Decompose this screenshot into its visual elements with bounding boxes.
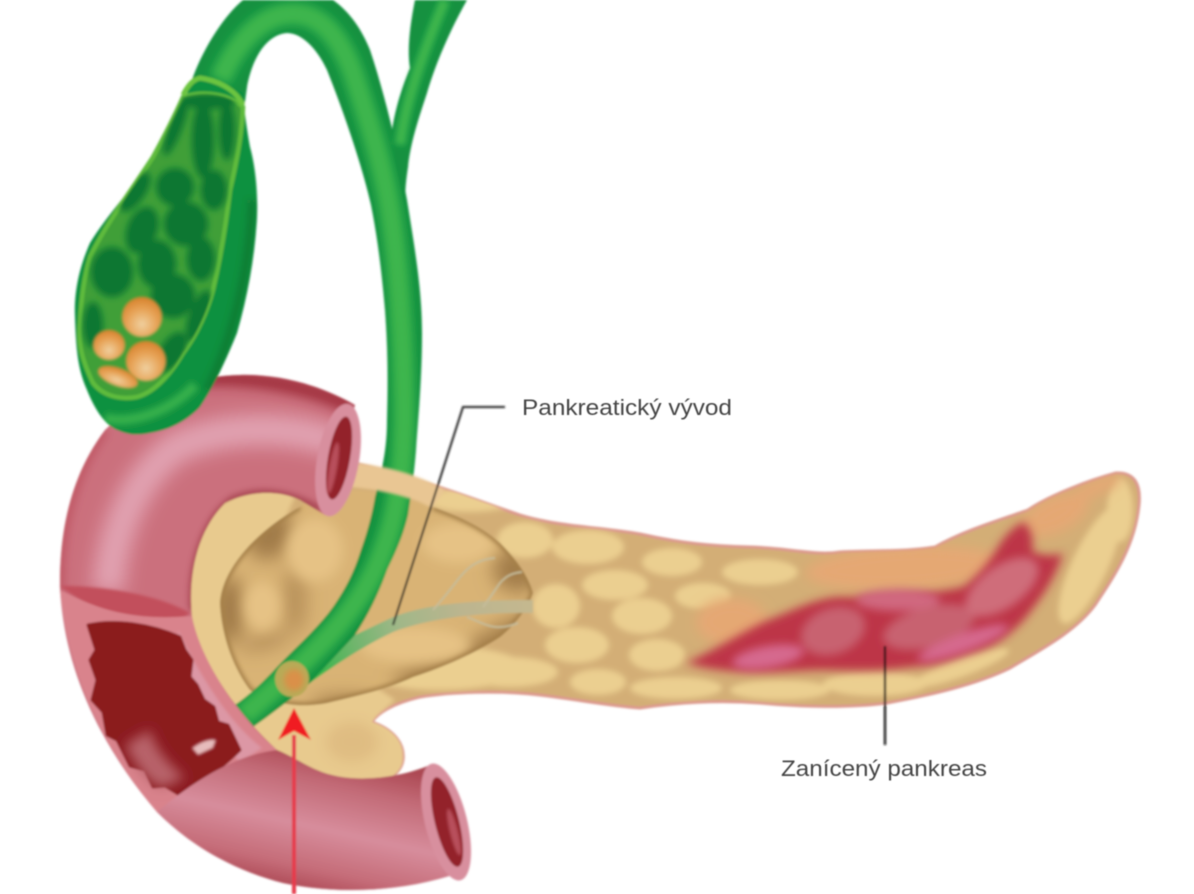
head light rim xyxy=(185,485,405,790)
label: Pankreatický vývod: Pankreatický vývod xyxy=(522,395,732,420)
pancreas cut-away cavity xyxy=(219,506,534,706)
leader line: pancreatic duct xyxy=(393,407,505,625)
opened wall xyxy=(60,590,277,812)
duodenum lumen xyxy=(88,622,240,797)
cavity shading xyxy=(221,515,530,702)
cream band across duct xyxy=(350,462,445,508)
peach zone near inflammation xyxy=(696,468,1126,646)
pancreatic duct xyxy=(310,558,533,683)
gallbladder xyxy=(75,77,257,435)
duodenum upper segment xyxy=(60,378,355,610)
impacted stone in ampulla xyxy=(275,661,309,697)
gallbladder neck rim xyxy=(183,78,243,105)
folded mucosa edge xyxy=(178,630,262,762)
duodenal papilla xyxy=(192,739,216,755)
leader line: inflamed pancreas xyxy=(884,646,886,745)
hepatic duct branch xyxy=(392,0,467,205)
mucosal pockets xyxy=(83,93,236,377)
red arrow pointing to blockage xyxy=(278,708,311,894)
pancreatic lobules xyxy=(374,478,1135,730)
common bile duct and cystic duct xyxy=(193,0,422,727)
cut edge lip xyxy=(60,586,190,624)
gallstones xyxy=(93,297,166,393)
gallbladder interior xyxy=(80,93,243,398)
duodenum xyxy=(60,375,481,890)
lower opening xyxy=(411,759,481,885)
pancreas body and head xyxy=(170,462,1139,790)
inflamed region xyxy=(686,522,1063,674)
upper opening xyxy=(307,400,369,520)
duodenum lower segment xyxy=(157,750,467,890)
label: Zanícený pankreas: Zanícený pankreas xyxy=(781,756,987,781)
